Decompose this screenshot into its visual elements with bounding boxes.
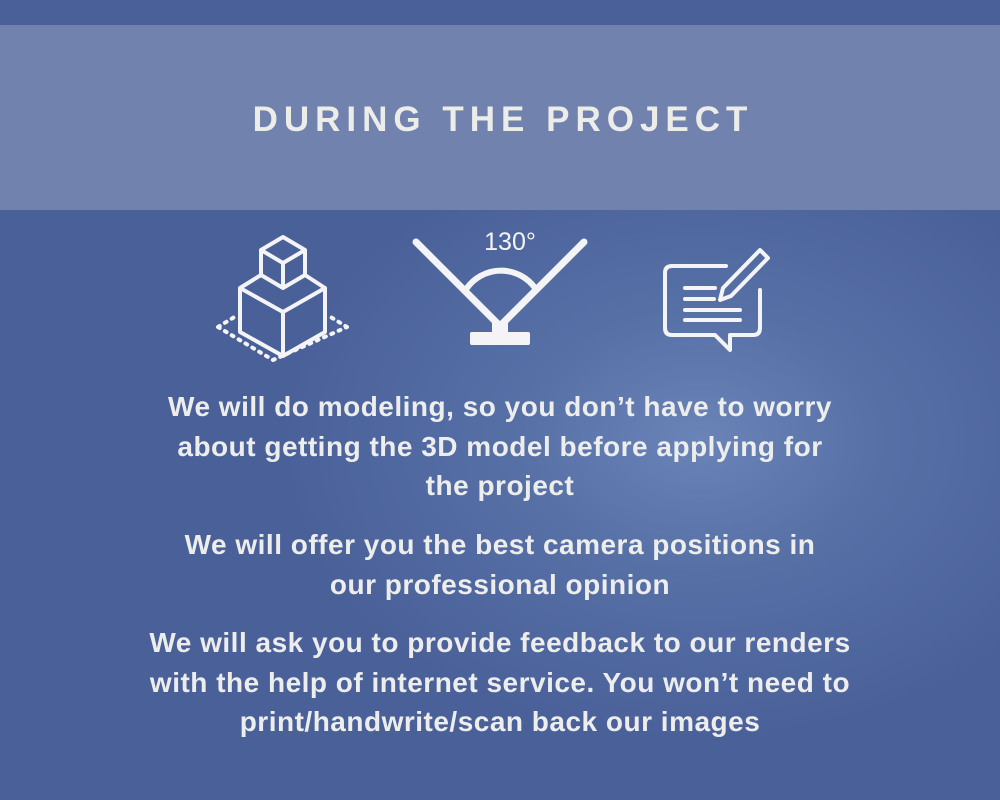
text block: camera positions: our professional opinion bbox=[330, 568, 670, 600]
text block: feedback bbox=[149, 627, 851, 737]
icon: cube model bbox=[218, 237, 347, 360]
text block: modeling: We will do modeling, so you don’t have to worry bbox=[168, 391, 832, 422]
icon: 130 degree angle: 130° bbox=[484, 228, 536, 256]
text block: feedback: We will ask you to provide feedback to our renders bbox=[149, 627, 851, 658]
text block: modeling: the project bbox=[426, 470, 574, 501]
text block: modeling bbox=[168, 391, 832, 501]
text block: feedback: with the help of internet service. You won’t need to bbox=[150, 666, 850, 698]
header banner bbox=[0, 25, 1000, 210]
text block: feedback: print/handwrite/scan back our images bbox=[240, 706, 760, 737]
text block: modeling: about getting the 3D model before applying for bbox=[177, 430, 823, 462]
icon: 130 degree angle bbox=[416, 228, 584, 345]
text block: camera positions: We will offer you the best camera positions in bbox=[185, 529, 815, 560]
icons bbox=[216, 228, 770, 362]
title: DURING THE PROJECT bbox=[253, 100, 753, 139]
text block: camera positions bbox=[184, 529, 815, 600]
icon: feedback chat with pencil bbox=[665, 250, 768, 350]
